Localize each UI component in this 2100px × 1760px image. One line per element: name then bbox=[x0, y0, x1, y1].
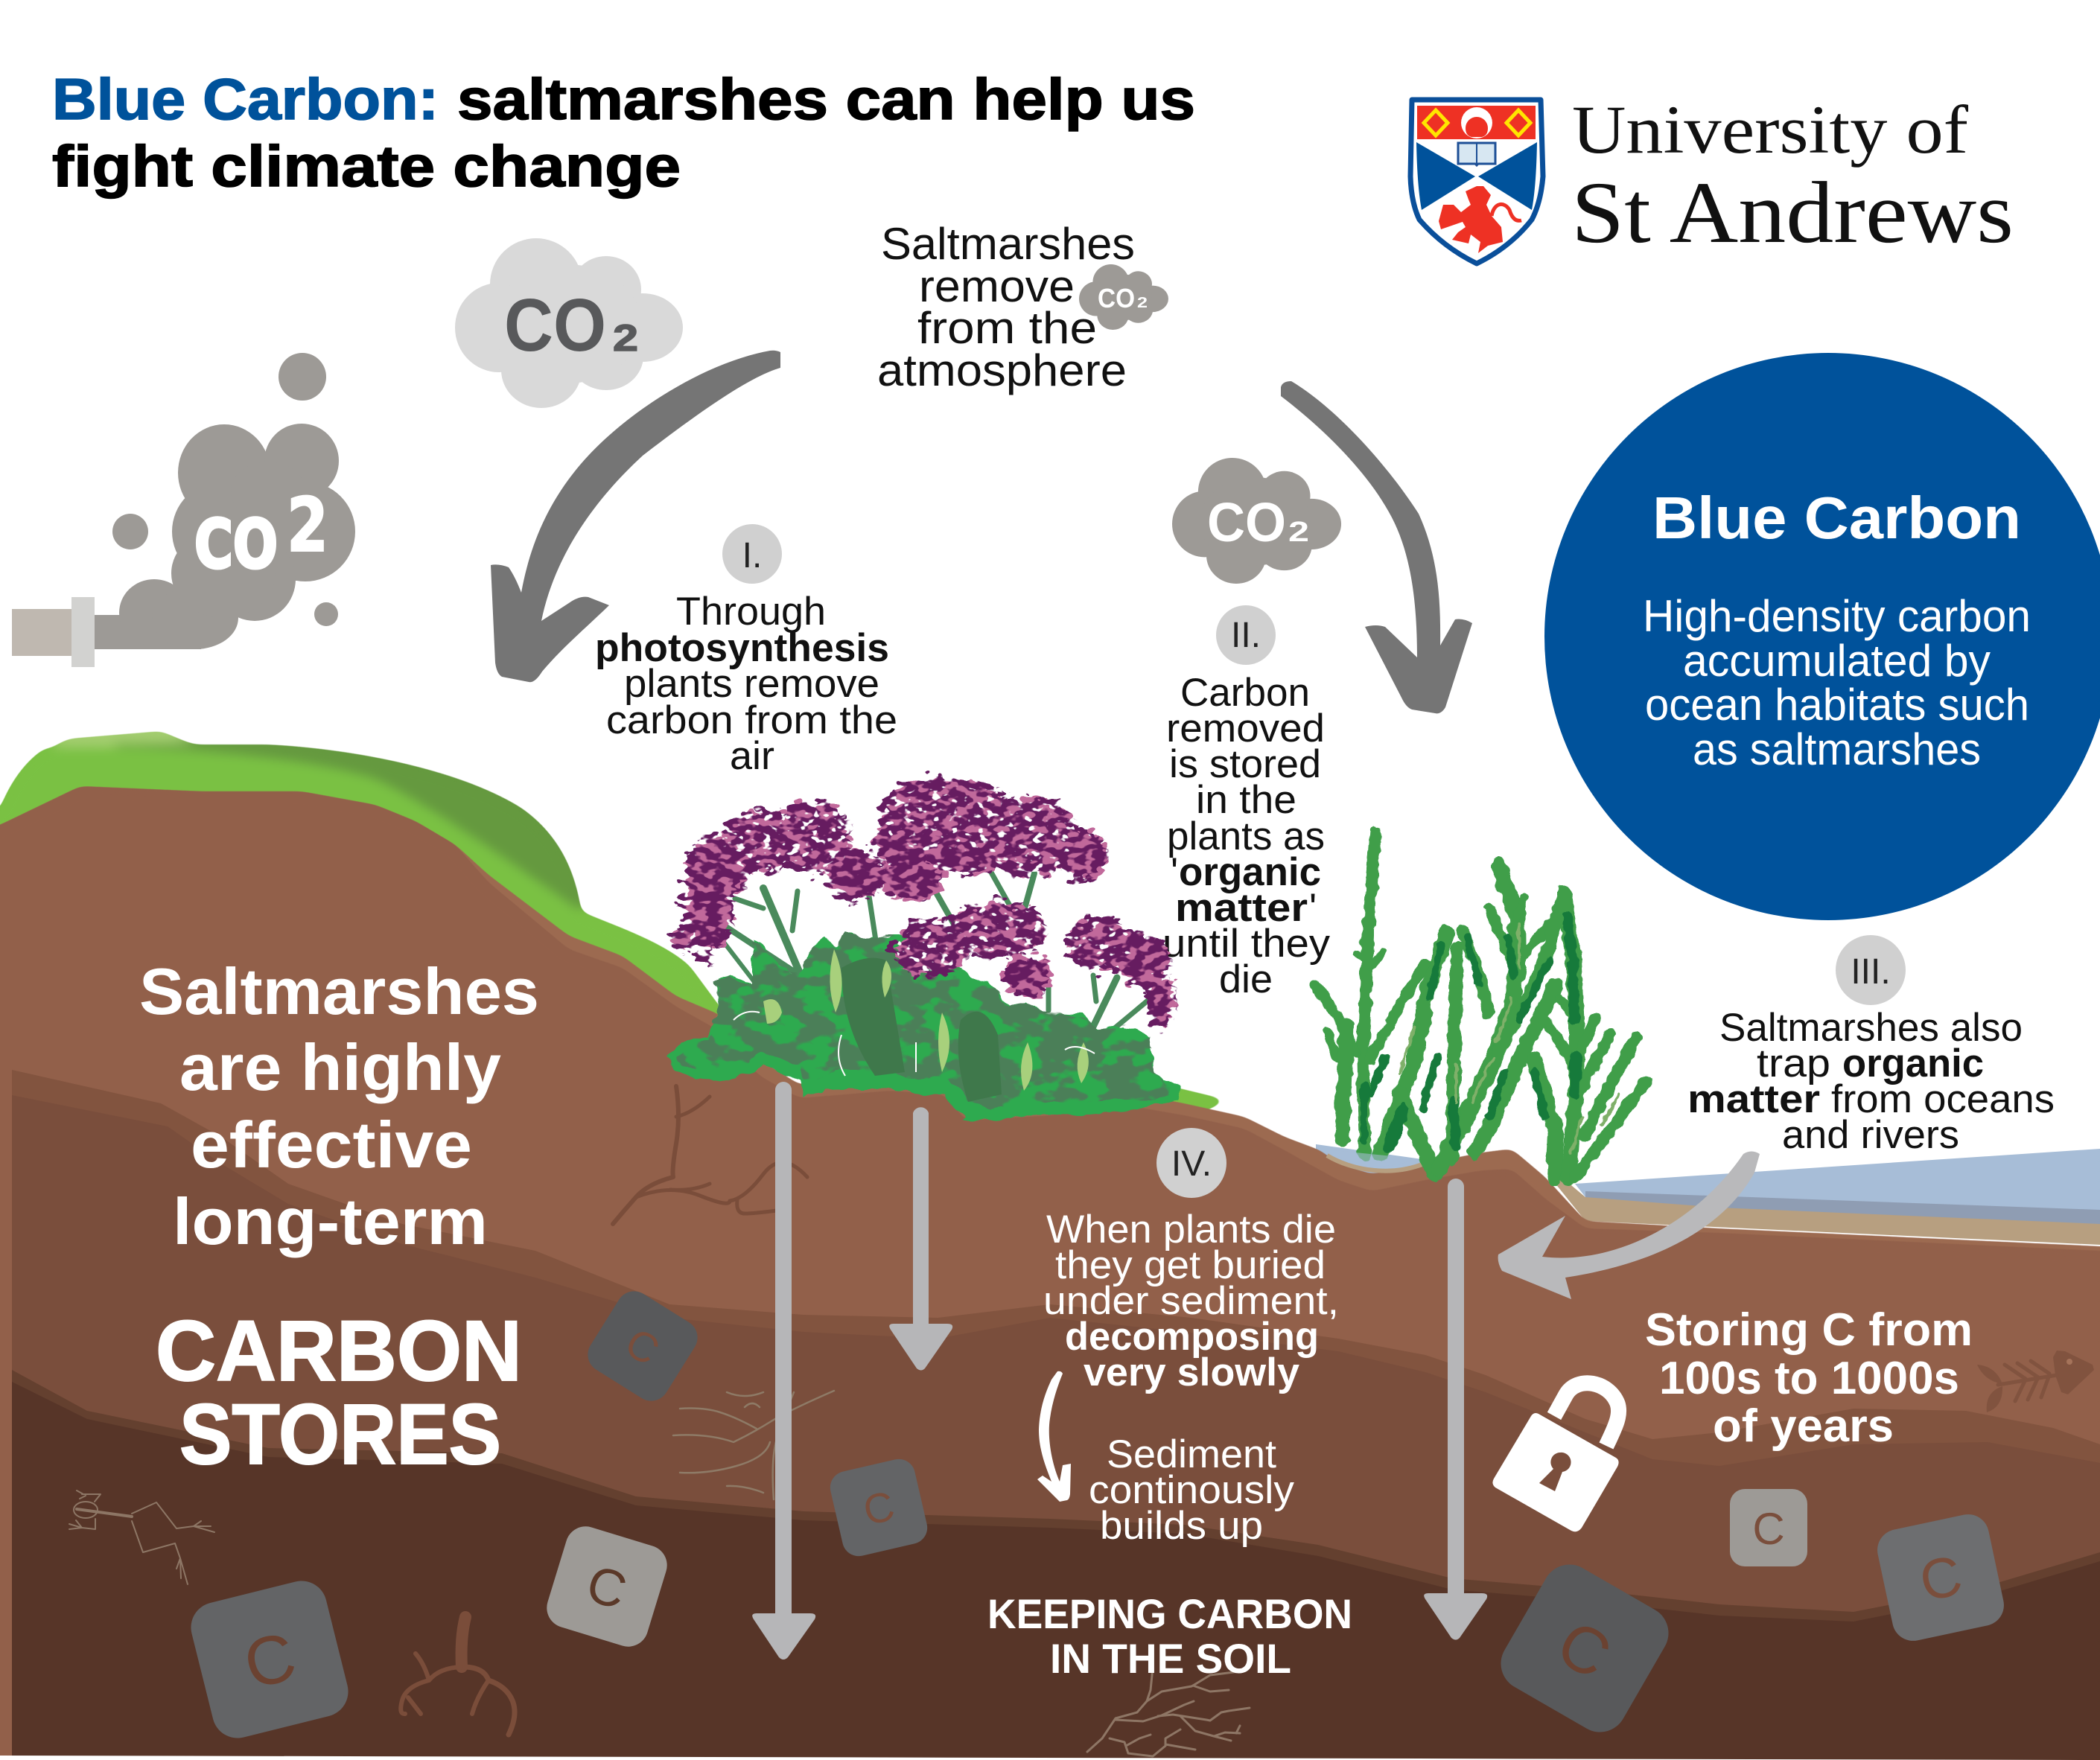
step III: trapping organic matter bbox=[1687, 935, 2055, 1157]
tidal pool sand rim bbox=[1327, 1155, 1428, 1171]
intro text: saltmarshes remove CO2: Saltmarshes bbox=[881, 219, 1135, 269]
carbon block: right light bbox=[1730, 1489, 1807, 1566]
step I: photosynthesis: carbon from the bbox=[606, 698, 897, 742]
step II: organic matter: removed bbox=[1166, 707, 1325, 750]
panel: blue carbon definition circle: High-density carbon bbox=[1643, 591, 2031, 641]
step II: organic matter: organic bbox=[1179, 850, 1321, 894]
text: carbon stores: STORES bbox=[179, 1387, 501, 1482]
step III: trapping organic matter: trap bbox=[1757, 1042, 1830, 1085]
icon: padlock bbox=[1492, 1383, 1619, 1531]
carbon block: bottom dark: C bbox=[1545, 1606, 1623, 1693]
step II: organic matter: die bbox=[1219, 957, 1273, 1001]
text: saltmarshes are highly effective bbox=[139, 954, 539, 1258]
icon: factory smoke pipe with CO2 bbox=[12, 353, 355, 667]
step II: organic matter: ' bbox=[1309, 886, 1317, 930]
title: fight climate change bbox=[52, 133, 681, 199]
step I: photosynthesis: plants remove bbox=[624, 662, 879, 706]
flowers: white gaps bbox=[722, 785, 1133, 972]
icon: small inline CO2 cloud: 2 bbox=[1137, 295, 1148, 311]
water and sand at the shore bbox=[1575, 1149, 2100, 1224]
step IV: burial under sediment: under sediment, bbox=[1043, 1279, 1339, 1323]
intro text: saltmarshes remove CO2: atmosphere bbox=[877, 345, 1127, 395]
carbon block: light grey bbox=[542, 1522, 672, 1651]
step III: trapping organic matter: and rivers bbox=[1782, 1113, 1959, 1157]
arrow: sediment builds up bbox=[1037, 1371, 1071, 1502]
step II: organic matter: in the bbox=[1196, 778, 1296, 822]
step II: organic matter: plants as bbox=[1167, 814, 1325, 858]
step IV: burial under sediment: very slowly bbox=[1084, 1351, 1300, 1394]
plant: sea lavender bbox=[668, 777, 1183, 1120]
intro text: saltmarshes remove CO2: from the bbox=[917, 303, 1097, 353]
carbon block: right grey: C bbox=[1915, 1543, 1967, 1614]
step I: photosynthesis: air bbox=[730, 734, 774, 778]
step III: trapping organic matter: Saltmarshes also bbox=[1719, 1006, 2023, 1050]
text: keeping carbon in the soil: KEEPING CARBON bbox=[987, 1590, 1352, 1637]
carbon block: dark upper bbox=[581, 1284, 704, 1408]
panel: blue carbon definition circle: Blue Carbon bbox=[1652, 485, 2021, 551]
text: storing C for centuries: 100s to 1000s bbox=[1659, 1353, 1959, 1404]
step IV: burial under sediment: decomposing bbox=[1065, 1315, 1319, 1359]
arrow: atmosphere down to plants, left bbox=[491, 351, 780, 682]
carbon block: right light: C bbox=[1752, 1504, 1785, 1554]
text: storing C for centuries bbox=[1645, 1304, 1973, 1452]
step II: organic matter: ' bbox=[1171, 850, 1178, 894]
panel: blue carbon definition circle bbox=[1544, 353, 2100, 920]
panel: blue carbon definition circle: as saltmarshes bbox=[1693, 724, 1981, 774]
icon: factory smoke pipe with CO2: 2 bbox=[287, 482, 328, 569]
carbon block: dark upper: C bbox=[617, 1319, 668, 1374]
step IV: burial under sediment: they get buried bbox=[1055, 1243, 1326, 1287]
dark and pale leaves bbox=[734, 949, 1095, 1102]
carbon block: middle grey: C bbox=[859, 1482, 899, 1534]
step I: photosynthesis: I. bbox=[742, 536, 762, 575]
title: Blue Carbon: bbox=[52, 66, 439, 132]
step I: photosynthesis: Through bbox=[676, 590, 826, 634]
carbon block: large grey bbox=[185, 1575, 354, 1744]
step IV: burial under sediment: IV. bbox=[1171, 1144, 1212, 1184]
foliage base bbox=[668, 933, 1183, 1120]
arrow: atmosphere down to plants, right bbox=[1281, 381, 1472, 713]
text: storing C for centuries: of years bbox=[1713, 1400, 1894, 1452]
arrow: organic matter from ocean into soil bbox=[1498, 1151, 1760, 1299]
text: saltmarshes are highly effective: are highly bbox=[179, 1030, 501, 1104]
logo: University of St Andrews: University of bbox=[1572, 92, 1968, 168]
arrow: short burial arrow 2 bbox=[889, 1107, 952, 1370]
step II: organic matter: II. bbox=[1231, 616, 1261, 655]
step II: organic matter: until they bbox=[1162, 922, 1331, 966]
text: saltmarshes are highly effective: effective bbox=[191, 1108, 472, 1182]
carbon block: right grey bbox=[1874, 1511, 2008, 1645]
text: sediment continuously builds up: Sediment bbox=[1107, 1432, 1276, 1476]
step II: organic matter: is stored bbox=[1169, 742, 1321, 786]
icon: light CO2 cloud: 2 bbox=[613, 317, 638, 359]
title bbox=[52, 66, 1195, 199]
step III: trapping organic matter: matter bbox=[1687, 1077, 1820, 1121]
icon: mid CO2 cloud: 2 bbox=[1288, 517, 1309, 548]
text: sediment continuously builds up: builds up bbox=[1100, 1504, 1263, 1548]
root: tan bottom roots bbox=[1087, 1668, 1250, 1756]
ground: soil layers, grass, water bbox=[0, 731, 2100, 1760]
foliage mottling bbox=[678, 933, 1175, 1109]
samphire main stems bbox=[1317, 832, 1646, 1179]
stems bbox=[715, 871, 1151, 1039]
step III: trapping organic matter: organic bbox=[1842, 1042, 1984, 1085]
icon: mid CO2 cloud bbox=[1172, 458, 1341, 584]
intro text: saltmarshes remove CO2 bbox=[877, 219, 1135, 395]
text: sediment continuously builds up: continously bbox=[1089, 1468, 1295, 1512]
step I: photosynthesis bbox=[595, 524, 897, 778]
grass on the hill bbox=[0, 731, 1229, 1117]
flowers: pink base bbox=[672, 779, 1174, 1025]
middle soil band bbox=[12, 1070, 2100, 1760]
icon: factory smoke pipe with CO2: CO bbox=[194, 506, 278, 584]
step II: organic matter bbox=[1162, 605, 1331, 1001]
panel: blue carbon definition circle: accumulated by bbox=[1683, 636, 1991, 686]
text: carbon stores: CARBON bbox=[156, 1304, 522, 1399]
root: upper brown bbox=[613, 1086, 807, 1224]
text: saltmarshes are highly effective: Saltmarshes bbox=[139, 954, 539, 1028]
root: thick lower brown bbox=[401, 1617, 515, 1735]
text: carbon stores bbox=[156, 1304, 522, 1482]
icon: light CO2 cloud bbox=[455, 238, 683, 408]
tidal pool tint over stems bbox=[1333, 1150, 1415, 1167]
deep soil band bbox=[12, 1370, 2100, 1760]
carbon block: large grey: C bbox=[237, 1618, 303, 1703]
carbon block: bottom dark bbox=[1491, 1555, 1679, 1742]
step II: organic matter: Carbon bbox=[1180, 671, 1310, 715]
icon: small inline CO2 cloud: CO bbox=[1098, 283, 1135, 313]
arrow: long burial arrow 1 bbox=[752, 1082, 815, 1659]
topsoil highlight bbox=[0, 786, 2100, 1760]
step IV: burial under sediment bbox=[1043, 1128, 1339, 1394]
text: sediment continuously builds up bbox=[1089, 1432, 1295, 1548]
icon: light CO2 cloud: CO bbox=[504, 284, 606, 367]
text: keeping carbon in the soil bbox=[987, 1590, 1352, 1682]
carbon block: middle grey bbox=[827, 1455, 931, 1560]
flowers: dark purple bbox=[671, 777, 1177, 1028]
arrow: long burial arrow 3 bbox=[1424, 1179, 1487, 1639]
plant: samphire bbox=[1317, 832, 1646, 1179]
step III: trapping organic matter: III. bbox=[1851, 952, 1891, 992]
root: tan fine roots bbox=[673, 1391, 834, 1499]
deep soil bbox=[12, 1382, 2100, 1760]
fossil: frog skeleton bbox=[69, 1490, 214, 1584]
samphire dark shading bbox=[1364, 916, 1576, 1147]
step IV: burial under sediment: When plants die bbox=[1046, 1208, 1336, 1252]
topsoil bbox=[0, 786, 2100, 1760]
text: keeping carbon in the soil: IN THE SOIL bbox=[1050, 1635, 1291, 1682]
panel: blue carbon definition circle: ocean habitats such bbox=[1645, 680, 2029, 730]
intro text: saltmarshes remove CO2: remove bbox=[919, 261, 1075, 311]
logo: University of St Andrews: St Andrews bbox=[1571, 164, 2014, 261]
carbon block: light grey: C bbox=[580, 1554, 633, 1621]
samphire pale highlights bbox=[1400, 923, 1620, 1154]
step III: trapping organic matter: from oceans bbox=[1831, 1077, 2055, 1121]
crest shield bbox=[1410, 100, 1543, 264]
fossil: fish skeleton bbox=[1977, 1351, 2094, 1412]
middle soil bbox=[12, 1095, 2100, 1760]
step II: organic matter: matter bbox=[1175, 886, 1308, 930]
title: saltmarshes can help us bbox=[457, 66, 1195, 132]
step I: photosynthesis: photosynthesis bbox=[595, 626, 889, 670]
text: storing C for centuries: Storing C from bbox=[1645, 1304, 1973, 1356]
text: saltmarshes are highly effective: long-term bbox=[173, 1185, 488, 1258]
tidal pool water bbox=[1316, 1144, 1428, 1191]
icon: mid CO2 cloud: CO bbox=[1207, 491, 1286, 553]
logo: University of St Andrews bbox=[1410, 92, 2014, 264]
icon: small inline CO2 cloud bbox=[1079, 264, 1168, 330]
